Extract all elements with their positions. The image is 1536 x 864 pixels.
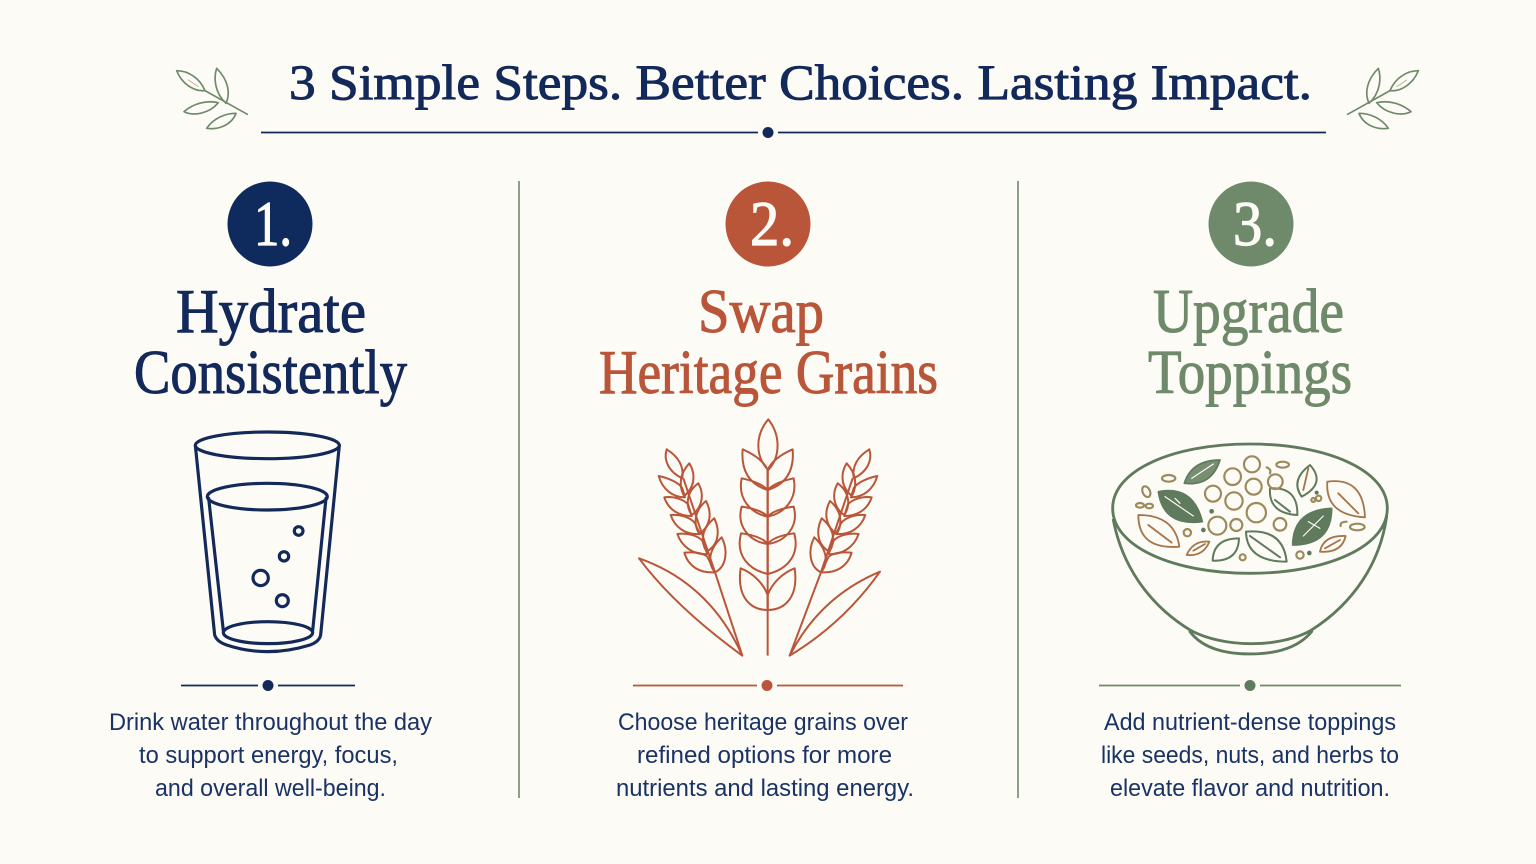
step number 3: 3. [1233, 188, 1277, 259]
step number 1: 1. [254, 188, 292, 259]
step number 1 [228, 182, 312, 266]
step number 2 [726, 182, 810, 266]
description: elevate flavor and nutrition. [1110, 775, 1390, 802]
step number 3 [1208, 182, 1294, 266]
icon: left leaf sprig [177, 68, 247, 129]
description: to support energy, focus, [139, 742, 398, 769]
heading: swap heritage grains [599, 278, 938, 407]
ornament rule [1099, 680, 1401, 691]
filled dark leaves [1158, 491, 1332, 545]
ornament rule [633, 680, 903, 691]
round seeds [1136, 456, 1365, 560]
description: like seeds, nuts, and herbs to [1101, 742, 1399, 769]
panel: step 3 upgrade [1099, 182, 1401, 802]
almonds [1138, 468, 1365, 555]
column divider left [518, 181, 520, 798]
title rule [261, 127, 1326, 138]
dark leaf top [1184, 460, 1220, 484]
panel: step 2 swap [599, 182, 938, 802]
title: 3 Simple Steps. Better Choices. Lasting Impact. [289, 54, 1312, 110]
small herb specks [1201, 491, 1319, 555]
icon: bowl with toppings [1113, 444, 1387, 654]
heading: upgrade toppings [1148, 278, 1352, 407]
outlined leaves [1213, 465, 1317, 562]
description: Drink water throughout the day [109, 709, 432, 736]
heading: swap heritage grains: Heritage Grains [599, 339, 938, 407]
step number 2: 2. [750, 188, 794, 259]
heading: swap heritage grains: Swap [698, 278, 824, 346]
description: refined options for more [637, 742, 892, 769]
description [109, 709, 432, 802]
description: Add nutrient-dense toppings [1104, 709, 1396, 736]
icon: wheat stalks [639, 419, 880, 656]
description: nutrients and lasting energy. [616, 775, 914, 802]
heading: upgrade toppings: Toppings [1148, 339, 1352, 407]
icon: glass of water [195, 432, 339, 652]
heading: hydrate consistently: Consistently [134, 339, 407, 407]
description: and overall well-being. [155, 775, 386, 802]
heading: hydrate consistently [134, 278, 407, 407]
heading: hydrate consistently: Hydrate [176, 278, 366, 346]
heading: upgrade toppings: Upgrade [1153, 278, 1344, 346]
description [616, 709, 914, 802]
panel: step 1 hydrate [109, 182, 432, 802]
ornament rule [181, 680, 355, 691]
description [1101, 709, 1399, 802]
column divider right [1017, 181, 1019, 798]
description: Choose heritage grains over [618, 709, 908, 736]
icon: right leaf sprig [1348, 68, 1418, 129]
